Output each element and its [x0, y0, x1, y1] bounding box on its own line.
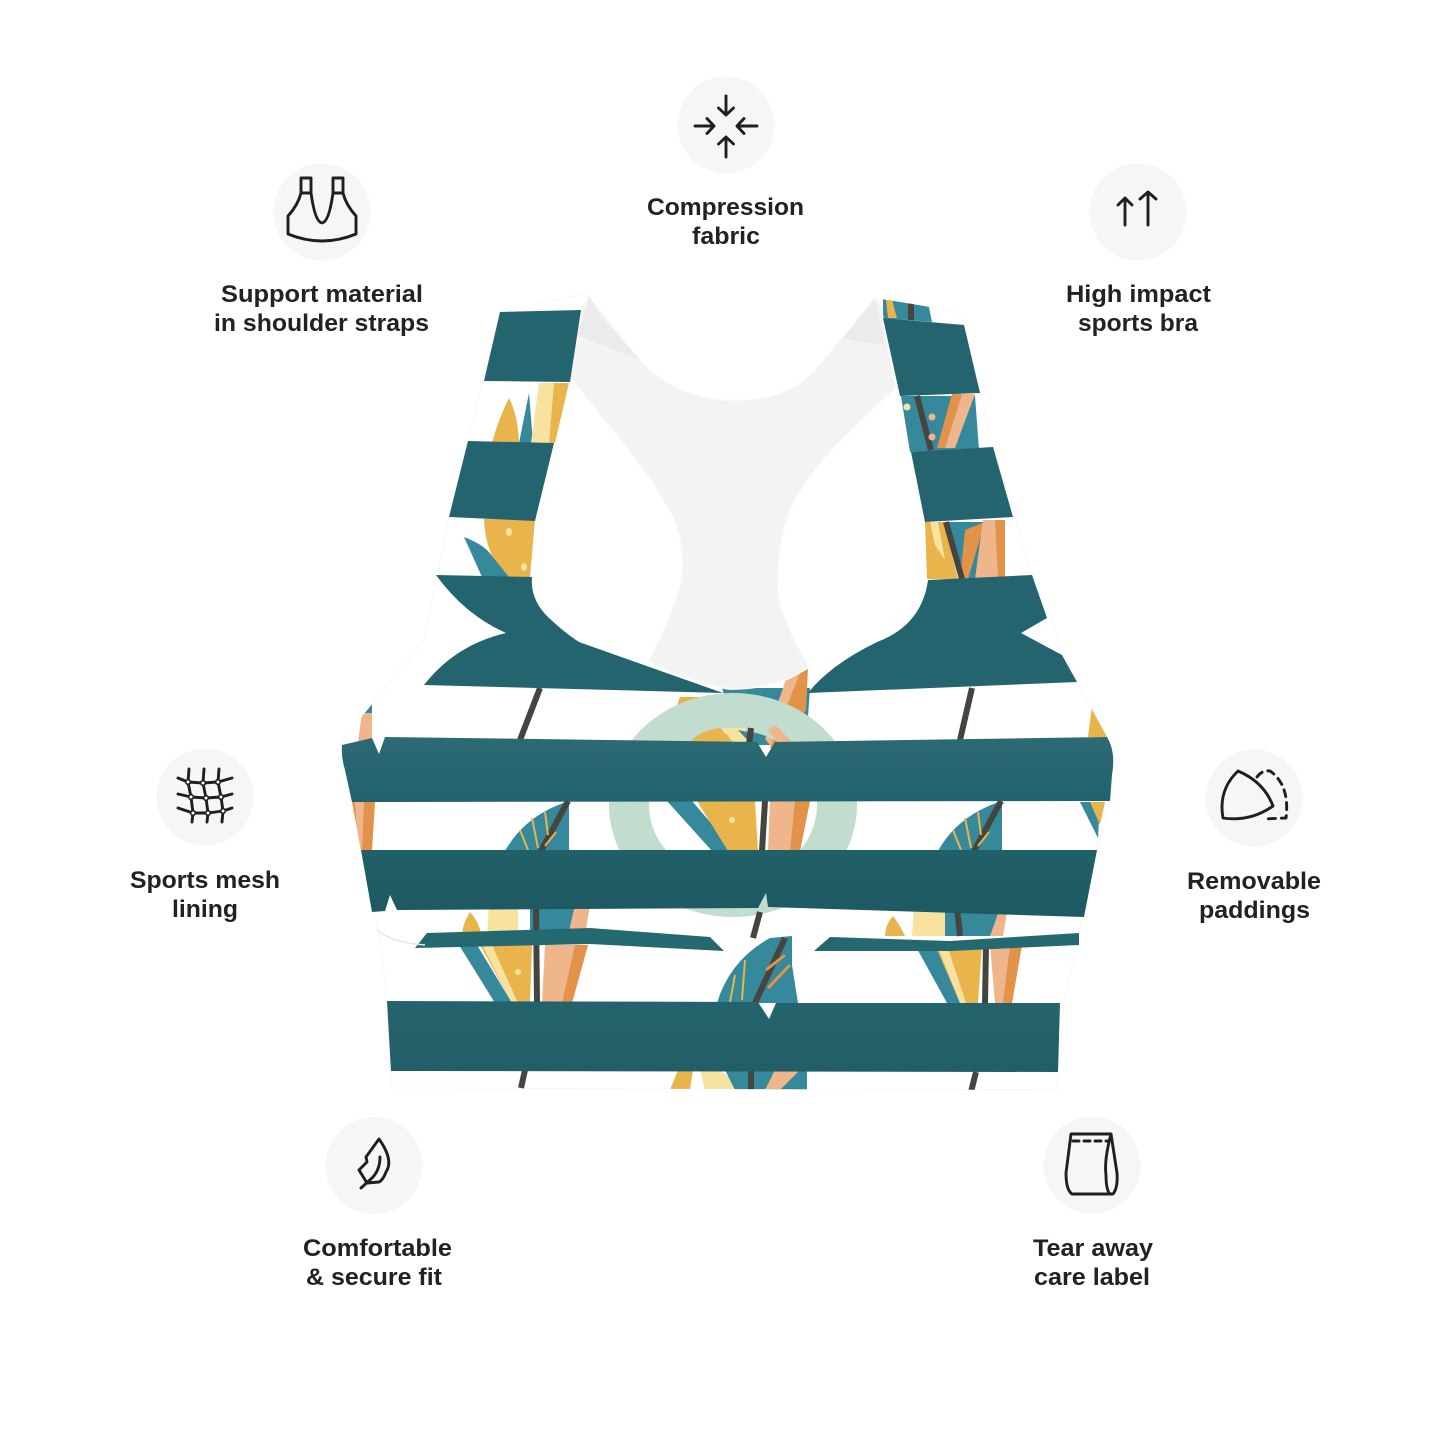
right strap stripe 2: [911, 447, 1013, 522]
lower right feather: [885, 908, 1022, 1003]
chest stripe B: [361, 850, 1097, 917]
mesh shadow fold: [577, 296, 885, 360]
feather stems: [520, 688, 976, 1092]
label: Support material: [221, 281, 423, 308]
feature: high impact: [1066, 164, 1211, 337]
label: & secure fit: [306, 1264, 442, 1291]
waistband left piece: [415, 928, 724, 951]
lower centre leaf: [717, 936, 798, 1003]
label: fabric: [692, 223, 760, 250]
fabric silhouette: [342, 294, 1117, 1090]
icon: mesh net: [156, 748, 254, 846]
right strap stripe 1: [883, 318, 980, 396]
side print fragments: [352, 695, 1110, 851]
icon: feather: [326, 1117, 422, 1214]
hem stripe C: [387, 1001, 1060, 1072]
left leaf: [505, 801, 569, 851]
label: High impact: [1066, 281, 1211, 308]
left bust shape: [424, 575, 723, 693]
icon: padding: [1206, 750, 1302, 846]
label: paddings: [1199, 897, 1310, 924]
left strap stripe 2: [449, 441, 554, 521]
feathers on right strap: [883, 298, 1005, 579]
right bust shape: [808, 575, 1077, 693]
label: Sports mesh: [130, 867, 280, 894]
feature: tear away label: [1033, 1116, 1153, 1291]
waistband right piece: [814, 933, 1079, 951]
label: Compression: [647, 194, 804, 221]
label: sports bra: [1078, 310, 1198, 337]
icon: bra: [274, 164, 370, 260]
icon: care label: [1044, 1116, 1140, 1214]
lower left feather: [459, 902, 590, 1003]
bottom centre feather: [670, 1070, 807, 1090]
icon: compression arrows: [678, 76, 774, 174]
label: Removable: [1187, 868, 1321, 895]
teal stripes: [342, 310, 1113, 1072]
label: Comfortable: [303, 1235, 452, 1262]
label: care label: [1034, 1264, 1150, 1291]
feature: comfortable fit: [303, 1117, 452, 1291]
right leaf: [938, 801, 1002, 851]
feature: compression fabric: [647, 76, 804, 250]
chest stripe A: [342, 737, 1113, 802]
feature: support material: [214, 164, 429, 337]
printed feather pattern: [352, 298, 1110, 1092]
label: lining: [172, 896, 238, 923]
icon: up arrows: [1090, 164, 1186, 260]
waistband seam: [377, 930, 425, 945]
upper centre feather: [672, 668, 810, 748]
back mesh panel: [570, 296, 896, 689]
label: in shoulder straps: [214, 310, 429, 337]
label: Tear away: [1033, 1235, 1153, 1262]
feathers on left strap: [464, 383, 569, 577]
sports bra garment: [342, 294, 1117, 1092]
feature: removable paddings: [1187, 750, 1321, 924]
feature: sports mesh: [130, 748, 280, 923]
centre feather in ring: [667, 725, 810, 851]
mint ring: [609, 693, 857, 917]
left strap stripe 1: [484, 310, 581, 382]
